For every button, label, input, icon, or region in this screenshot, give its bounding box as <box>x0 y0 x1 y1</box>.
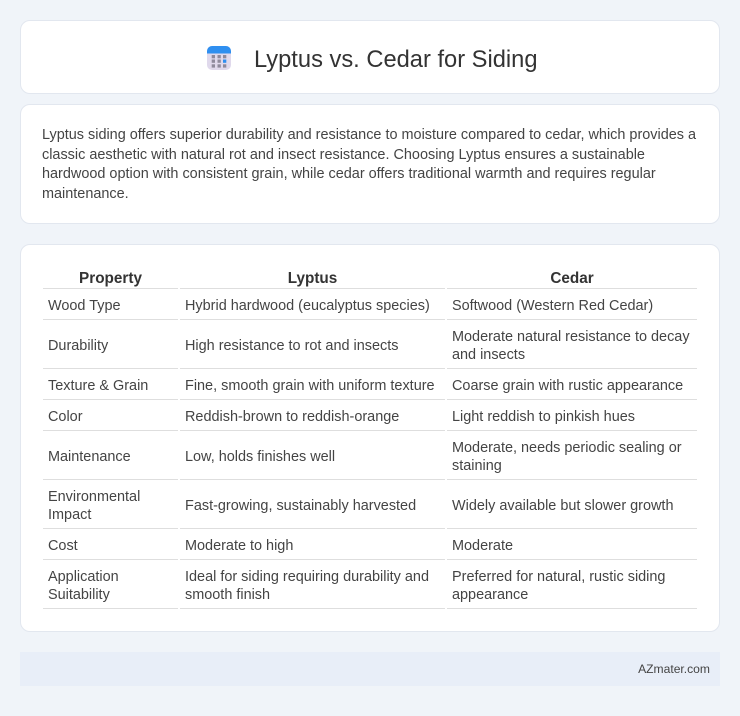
intro text: hardwood option with consistent grain, while cedar offers traditional warmth and requires regular <box>42 166 656 182</box>
table: Moderate to high <box>185 538 293 554</box>
table: Light reddish to pinkish hues <box>452 409 635 425</box>
row: Application Suitability: Application <box>48 569 119 585</box>
table: Widely available but slower growth <box>452 498 673 514</box>
row: Durability: Durability <box>48 338 108 354</box>
intro text: classic aesthetic with natural rot and insect resistance. Choosing Lyptus ensures a sustainable <box>42 146 645 162</box>
table: Fast-growing, sustainably harvested <box>185 498 416 514</box>
table: and insects <box>452 347 525 363</box>
row: Environmental Impact <box>48 489 140 523</box>
table: Reddish-brown to reddish-orange <box>185 409 399 425</box>
intro text: maintenance. <box>42 186 129 202</box>
header: Cedar: Cedar <box>550 270 594 287</box>
row: Maintenance: Maintenance <box>48 449 131 465</box>
icon: calendar <box>207 46 231 70</box>
table: Preferred for natural, rustic siding <box>452 569 665 585</box>
intro text <box>42 127 696 202</box>
intro text: Lyptus siding offers superior durability and resistance to moisture compared to cedar, which provides a <box>42 127 696 143</box>
table: staining <box>452 458 502 474</box>
table: High resistance to rot and insects <box>185 338 398 354</box>
row: Environmental Impact: Impact <box>48 507 91 523</box>
table: Low, holds finishes well <box>185 449 335 465</box>
footer bar <box>20 652 720 686</box>
table: appearance <box>452 587 528 603</box>
header: Lyptus: Lyptus <box>288 270 337 287</box>
intro panel <box>20 104 720 224</box>
footer credit: AZmater.com <box>638 662 710 676</box>
title card <box>20 20 720 94</box>
table: Fine, smooth grain with uniform texture <box>185 378 435 394</box>
title: Lyptus vs. Cedar for Siding <box>254 47 538 73</box>
table: Moderate <box>452 538 513 554</box>
row: Color: Color <box>48 409 83 425</box>
row: Cost: Cost <box>48 538 78 554</box>
row: Environmental Impact: Environmental <box>48 489 140 505</box>
comparison table panel <box>20 244 720 632</box>
row: Application Suitability <box>48 569 119 603</box>
table: Coarse grain with rustic appearance <box>452 378 683 394</box>
table: Hybrid hardwood (eucalyptus species) <box>185 298 430 314</box>
table: Moderate, needs periodic sealing or <box>452 440 682 456</box>
table: Ideal for siding requiring durability and <box>185 569 429 585</box>
table: Moderate natural resistance to decay <box>452 329 690 345</box>
row: Texture & Grain: Texture & Grain <box>48 378 148 394</box>
table: Softwood (Western Red Cedar) <box>452 298 653 314</box>
row: Wood Type: Wood Type <box>48 298 121 314</box>
header: Property: Property <box>79 270 142 287</box>
table: smooth finish <box>185 587 270 603</box>
row: Application Suitability: Suitability <box>48 587 110 603</box>
